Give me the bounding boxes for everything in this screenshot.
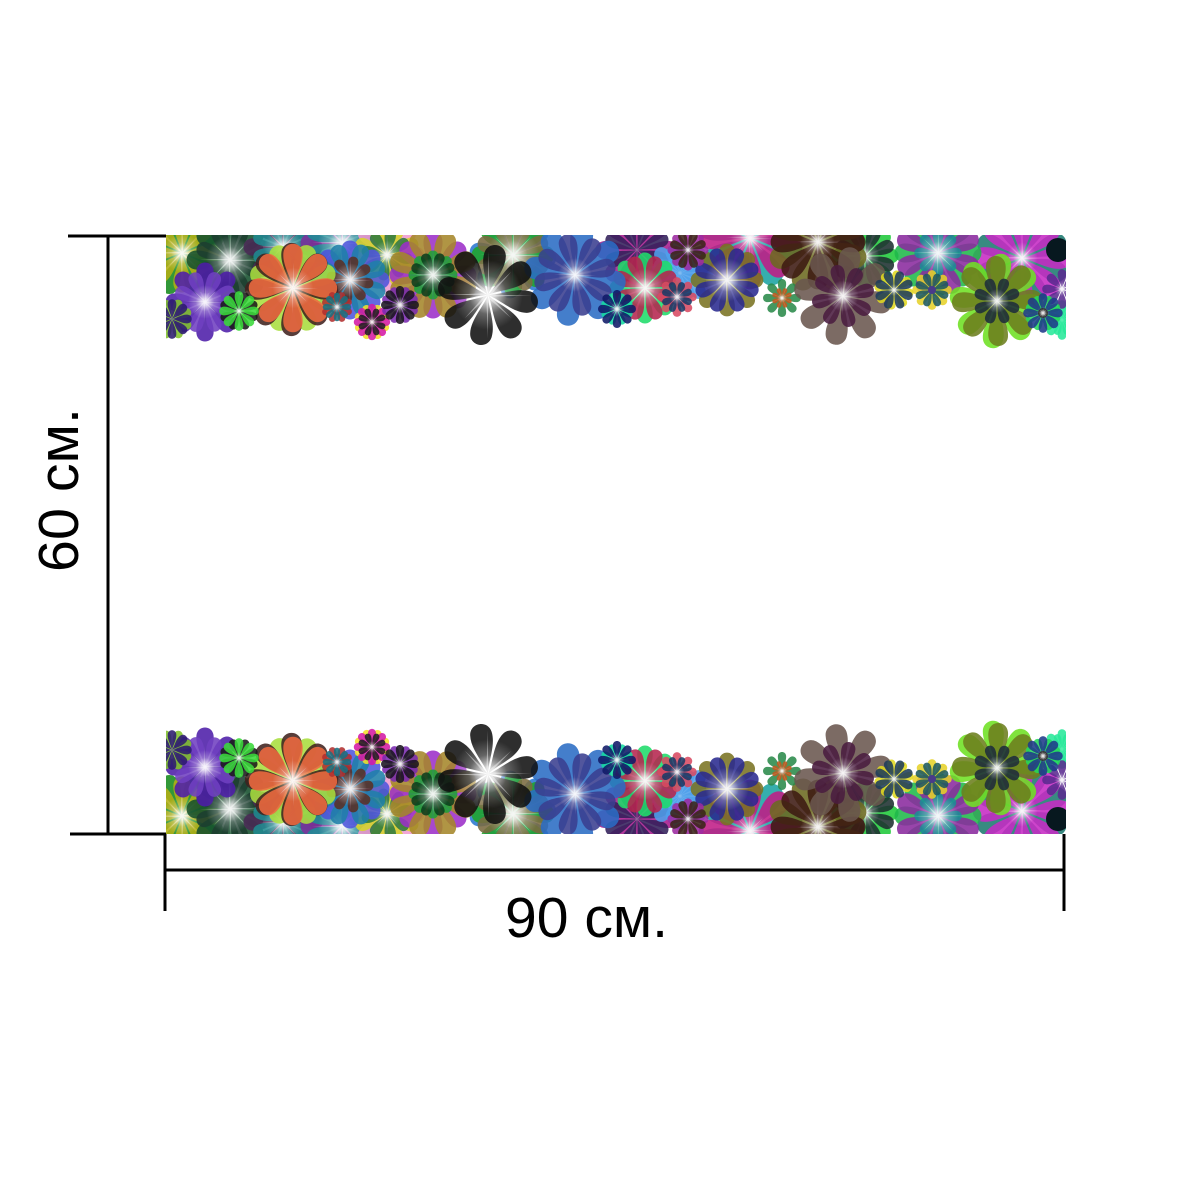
flower: olive navy [683, 236, 771, 324]
flower: dark purple small [145, 292, 199, 346]
label: width: 90 см. [505, 886, 668, 950]
flower: brown [786, 239, 900, 353]
label: height: 60 см. [27, 408, 91, 572]
flower: dark green white star [184, 214, 276, 306]
flower: purple indigo [164, 261, 246, 343]
dimension: height line [68, 236, 166, 834]
flower: dark brown [751, 175, 885, 309]
flower: magenta teal large [685, 173, 815, 303]
flower: olive lime [945, 249, 1049, 353]
flower: salmon navy [656, 276, 698, 318]
flower: yellow purple small [909, 267, 955, 313]
flower: green crimson [601, 244, 689, 332]
flower: green yellow corner [125, 196, 239, 310]
flower: light blue [644, 237, 716, 309]
flower: dark round at edge [1046, 238, 1070, 262]
flower: purple edge [1042, 269, 1082, 309]
flower: magenta dark [593, 206, 681, 294]
flower: green navy small [1019, 289, 1067, 337]
flower: olive purple green [374, 216, 492, 334]
flower: mint edge [1041, 299, 1083, 341]
flower: green small [213, 285, 265, 337]
flower: blue large [516, 216, 634, 334]
flower: dark behind orange [242, 206, 324, 288]
flower: dark purple [375, 280, 425, 330]
flower: green on blue [464, 206, 562, 304]
flower: green orange small [763, 279, 801, 317]
flower: pink green yellow [343, 211, 431, 299]
flower: blue purple [301, 231, 399, 329]
bottom flower band, mirrored [125, 715, 1084, 896]
flower: teal red small [316, 286, 358, 328]
flower: purple teal star [881, 196, 995, 310]
dimension: width line [165, 834, 1064, 911]
flower: purple teal [293, 194, 391, 292]
flower: navy yellow small [868, 264, 920, 316]
flower: purple dark small top [663, 225, 713, 275]
flower: magenta yellow small [348, 298, 396, 346]
flower: navy teal small [595, 287, 639, 331]
top flower band [125, 173, 1084, 354]
flower: black grey [429, 236, 547, 354]
flower: magenta corner [960, 196, 1084, 320]
flower: dark green star [825, 216, 905, 296]
flower: orange green [234, 229, 352, 347]
